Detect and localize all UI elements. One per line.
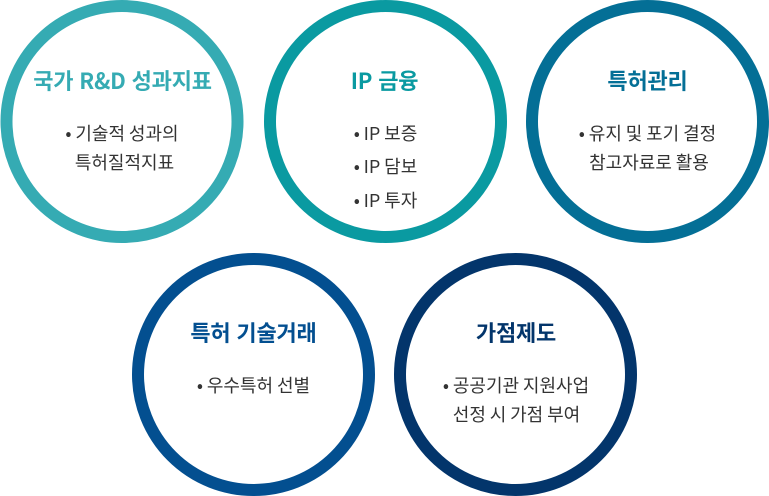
heading: patent technology trading: 특허 기술거래 (190, 316, 317, 348)
ring: blue-teal circle (532, 6, 763, 237)
heading: IP finance: IP 금융 (351, 64, 418, 96)
text block: IP list: • IP 투자 (354, 187, 418, 213)
panel: national R&D performance indicators (6, 6, 238, 237)
ring: teal circle (6, 6, 238, 237)
ring: blue circle (138, 259, 369, 490)
text block: details: • 기술적 성과의 (65, 120, 179, 146)
heading: patent management: 특허관리 (607, 64, 688, 96)
text block: IP list: • IP 보증 (354, 120, 417, 146)
heading: bonus point system: 가점제도 (476, 316, 556, 348)
text block: details: • 공공기관 지원사업 (443, 372, 589, 398)
text block: details: • 우수특허 선별 (197, 372, 310, 398)
panel: IP finance (270, 6, 501, 237)
text block: details: 참고자료로 활용 (589, 149, 709, 175)
text block: details: 선정 시 가점 부여 (453, 401, 580, 427)
panel: patent management (532, 6, 763, 237)
text block: IP list: • IP 담보 (354, 153, 417, 179)
heading: national R&D: 국가 R&D 성과지표 (33, 64, 212, 96)
text block: details: • 유지 및 포기 결정 (579, 120, 716, 146)
panel: patent technology trading (138, 259, 369, 490)
ring: green-teal circle (270, 6, 501, 237)
panel: bonus points (400, 259, 631, 490)
text block: details: 특허질적지표 (75, 149, 174, 175)
ring: navy circle (400, 259, 631, 490)
